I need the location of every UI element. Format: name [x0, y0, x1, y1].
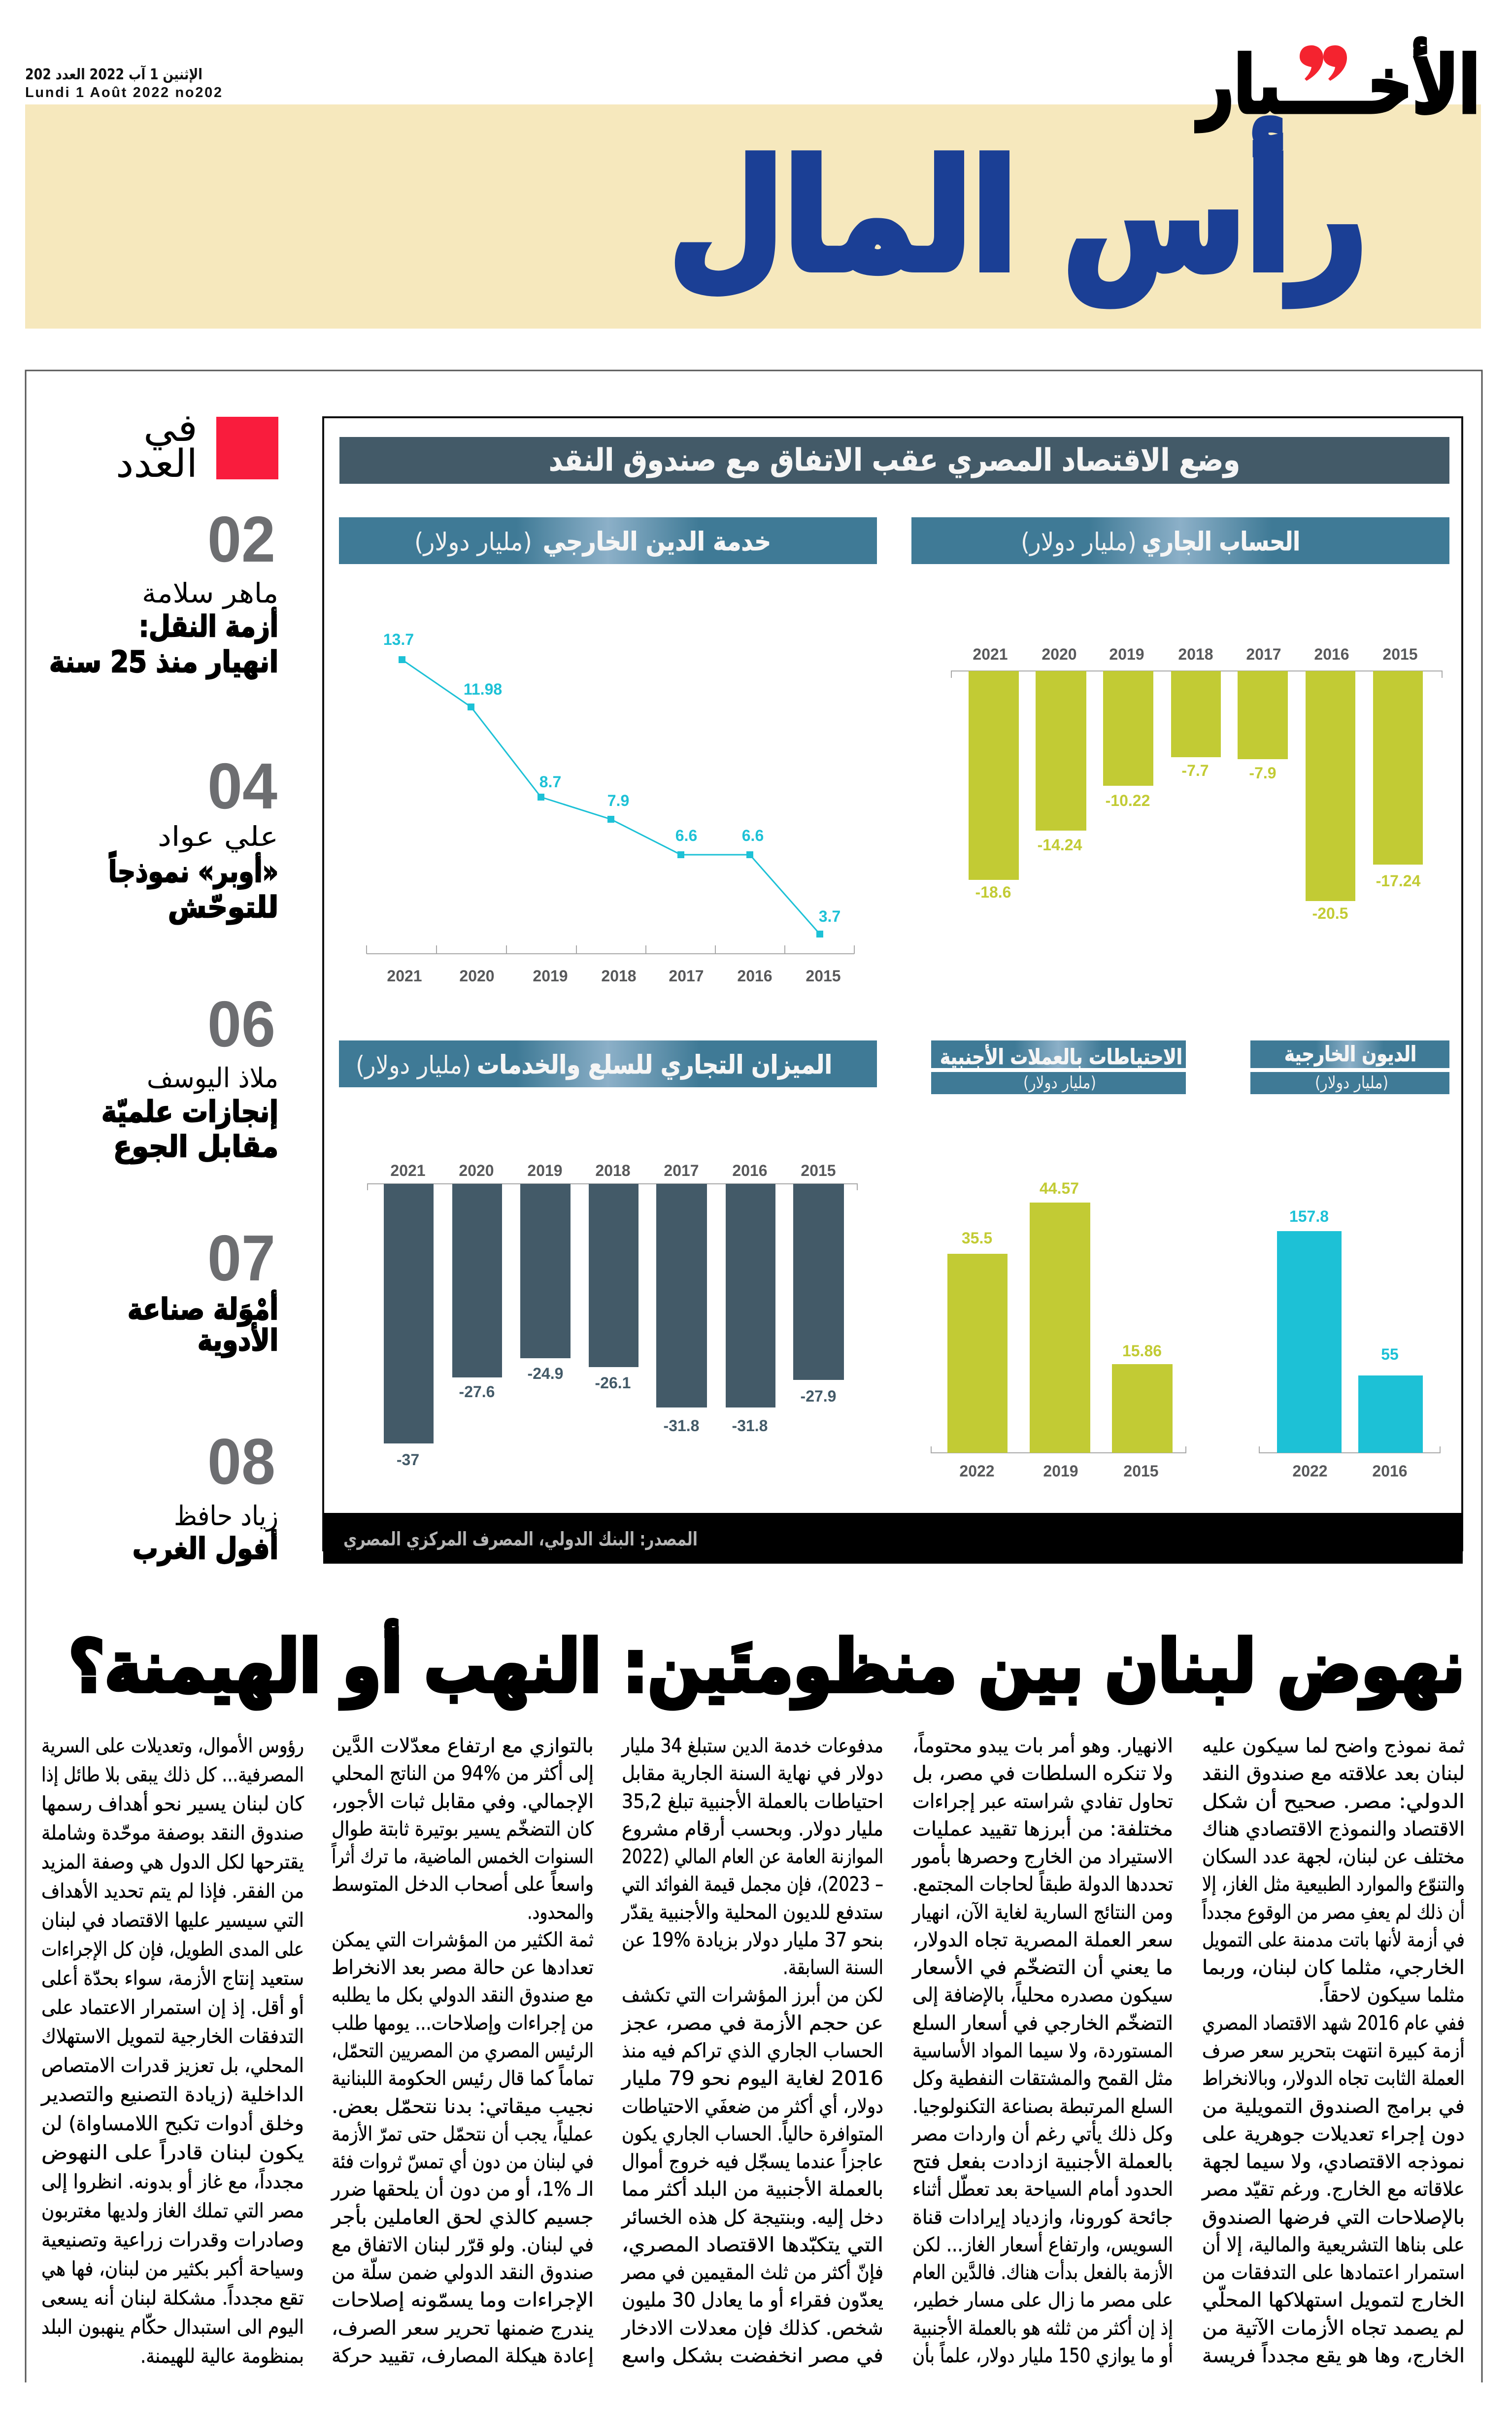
- line chart: 2018: [601, 967, 637, 985]
- article text: column 3: التي يتكبّدها الاقتصاد المصري،: [622, 2234, 883, 2256]
- article text: column 4: في لبنان. ولو قرّر لبنان الاتفاق مع: [332, 2234, 594, 2256]
- article text: column 3: يعدّون فقراء أو ما يعادل 30 مليون: [622, 2287, 883, 2312]
- heading: in this issue: العدد: [116, 442, 198, 486]
- banner: debt service: [339, 517, 877, 564]
- article text: column 1: الاقتصاد والنموذج الاقتصادي هناك: [1202, 1818, 1465, 1841]
- source bar: [323, 1513, 1463, 1564]
- article text: column 5: المصرفية... كل ذلك يبقى بلا طائل إذا: [41, 1764, 304, 1786]
- article text: column 4: مع صندوق النقد الدولي بكل ما يطلبه: [332, 1984, 594, 2007]
- panel: in this issue sidebar: [49, 406, 278, 1566]
- article text: column 5: مصر التي تملك الغاز ولديها مغتربون: [41, 2200, 304, 2222]
- article text: column 1: والتنوّع والموارد الطبيعية مثل الغاز، إلا: [1202, 1873, 1465, 1896]
- article text: column 5: وصادرات وقدرات زراعية وتصنيعية: [41, 2229, 304, 2251]
- article text: column 1: في برامج الصندوق التمويلية من: [1202, 2095, 1465, 2118]
- line chart: 2017: [669, 967, 704, 985]
- bar chart: 2019: [1043, 1462, 1078, 1480]
- article text: column 3: الحساب الجاري الذي تراكم فيه منذ: [622, 2040, 883, 2062]
- line chart: 2021: [387, 967, 422, 985]
- item: page 02: 02: [207, 503, 275, 575]
- article text: column 1: استمرار اعتمادها على التدفقات من: [1202, 2261, 1465, 2284]
- bar chart: 35.5: [962, 1229, 992, 1247]
- bar chart: 2019: [527, 1162, 563, 1179]
- article text: column 1: مختلف عن لبنان، لجهة عدد السكان: [1202, 1845, 1465, 1868]
- article text: column 4: بالتوازي مع ارتفاع معدّلات الدَّين: [332, 1734, 594, 1757]
- icon: red quote mark: [1300, 45, 1347, 81]
- item: page 07: أمْوَلة صناعة: [128, 1290, 278, 1327]
- bar chart: 2022: [959, 1462, 995, 1480]
- item: page 08: [133, 1425, 278, 1566]
- article text: column 2: المستوردة، ولا سيما المواد الأساسية: [912, 2038, 1173, 2062]
- bar chart: 2015: [1123, 1462, 1159, 1480]
- banner: foreign reserves: [931, 1040, 1186, 1094]
- heading: in this issue: [116, 406, 278, 486]
- item: page 04: للتوحّش: [168, 890, 278, 925]
- article text: column 5: رؤوس الأموال، وتعديلات على السرية: [41, 1733, 304, 1757]
- article text: column 3: ستدفع للديون المحلية والأجنبية يقدّر: [621, 1900, 883, 1924]
- article text: column 3: عن حجم الأزمة في مصر، عجز: [621, 2010, 883, 2035]
- article text: column 2: على مصر ما زال على مسار خطير،: [912, 2289, 1173, 2312]
- line chart: 8.7: [539, 773, 561, 791]
- bar chart: 15.86: [1122, 1342, 1162, 1360]
- article text: column 5: المحلي، بل تعزيز قدرات الامتصاص: [41, 2054, 304, 2077]
- article text: column 4: الإجمالي. وفي مقابل ثبات الأجور،: [332, 1789, 594, 1813]
- line chart: 3.7: [819, 907, 840, 925]
- article text: column 3: شخص. كذلك فإن معدلات الادخار: [621, 2317, 883, 2340]
- article text: column 1: أزمة كبيرة انتهت بتحرير سعر صرف: [1202, 2038, 1465, 2062]
- item: page 06: ملاذ اليوسف: [147, 1062, 278, 1094]
- article text: column 3: 2016 لغاية اليوم نحو 79 مليار: [621, 2067, 883, 2090]
- bar chart: 2018: [595, 1162, 631, 1179]
- article text: column 5: [40, 1733, 304, 2368]
- article text: column 2: إذ إن أكثر من ثلثه هو بالعملة الأجنبية: [912, 2315, 1173, 2340]
- article text: column 2: تحددها الدولة طبقاً لحاجات المجتمع.: [912, 1870, 1173, 1896]
- line chart: 6.6: [742, 827, 764, 844]
- article text: column 4: السنوات الخمس الماضية، ما ترك أثراً: [332, 1842, 594, 1868]
- article text: column 4: ثمة الكثير من المؤشرات التي يمكن: [332, 1929, 594, 1951]
- item: page 02: ماهر سلامة: [142, 577, 278, 609]
- item: page 08: زياد حافظ: [174, 1500, 278, 1532]
- masthead band: [25, 104, 1481, 329]
- article text: column 2: الأزمة بالفعل بدأت هناك. فالدَّين العام: [912, 2259, 1173, 2284]
- article text: column 1: أن ذلك لم يعفِ مصر من الوقوع مجدداً: [1202, 1898, 1465, 1924]
- article text: column 3: في مصر انخفضت بشكل واسع: [622, 2345, 883, 2367]
- article text: column 1: على بناها التشريعية والمالية، إلا أن: [1202, 2232, 1465, 2256]
- article text: column 4: والمحدود.: [527, 1901, 594, 1924]
- bar chart: 2021: [973, 645, 1008, 663]
- banner: current account: [911, 517, 1449, 564]
- item: page 04: [108, 750, 278, 925]
- bar chart: 2019: [1109, 645, 1144, 663]
- article text: column 4: إلى أكثر من %94 من الناتج المحلي: [332, 1760, 594, 1785]
- article text: column 2: سيكون مصدره محلياً، بالإضافة إلى: [912, 1980, 1173, 2007]
- date and issue: Lundi 1 Août 2022 no202: [25, 85, 222, 100]
- article text: column 5: من الفقر. فإذا لم يتم تحديد الأهداف: [41, 1878, 304, 1903]
- article text: column 4: يندرج ضمنها تحرير سعر الصرف،: [332, 2317, 594, 2340]
- banner: foreign reserves: الاحتياطات بالعملات الأجنبية: [940, 1044, 1182, 1070]
- article text: column 4: الـ %1، أو من دون أن يلحقها ضرر: [331, 2176, 594, 2201]
- line chart: [367, 631, 854, 985]
- bar chart: 2015: [801, 1162, 836, 1179]
- item: page 04: 04: [207, 750, 277, 822]
- bar chart: 2016: [1372, 1462, 1408, 1480]
- bar chart: 2016: [732, 1162, 768, 1179]
- line chart: 7.9: [607, 792, 629, 809]
- line chart: 2020: [459, 967, 495, 985]
- article text: column 3: المتوافرة حالياً. الحساب الجاري يكون: [622, 2119, 883, 2145]
- article text: column 2: التضخّم الخارجي في أسعار السلع: [912, 2010, 1173, 2035]
- article text: column 5: كان لبنان يسير نحو أهداف رسمها: [41, 1791, 304, 1815]
- article text: column 3: دولار في نهاية السنة الجارية مقابل: [622, 1762, 883, 1785]
- line chart: 11.98: [464, 680, 502, 698]
- bar chart: -7.9: [1249, 764, 1277, 782]
- article text: column 5: التدفقات الخارجية لتمويل الاستهلاك: [41, 2025, 304, 2048]
- article text: column 4: صندوق النقد الدولي ضمن سلّة من: [332, 2257, 594, 2284]
- line chart: 13.7: [383, 631, 414, 648]
- article text: column 4: واسعاً على أصحاب الدخل المتوسط: [332, 1870, 594, 1896]
- article text: column 4: جسيم كالذي لحق العاملين بأجر: [331, 2204, 594, 2229]
- item: page 06: 06: [207, 988, 275, 1060]
- article text: column 1: العملة الثابت تجاه الدولار، وبالانخراط: [1202, 2067, 1465, 2090]
- item: page 02: أزمة النقل:: [139, 607, 278, 644]
- article text: column 1: لم يصمد تجاه الأزمات الآتية من: [1202, 2315, 1465, 2340]
- banner: trade balance: الميزان التجاري للسلع والخدمات: [477, 1050, 832, 1080]
- article text: column 2: تحاول تفادي شراسته عبر إجراءات: [912, 1790, 1173, 1813]
- article text: column 2: مختلفة: من أبرزها تقييد عمليات: [912, 1816, 1173, 1841]
- item: page 04: «أوبر» نموذجاً: [108, 851, 278, 889]
- article text: column 3: مدفوعات خدمة الدين ستبلغ 34 مليار: [621, 1735, 883, 1757]
- bar chart: [368, 1162, 857, 1469]
- article text: column 5: بمنظومة عالية للهيمنة.: [140, 2345, 304, 2368]
- article text: column 1: الخارج لتمويل استهلاكها المحلّي: [1202, 2285, 1465, 2312]
- article text: column 1: علاقاته مع الخارج. ورغم تقيّد مصر: [1201, 2178, 1465, 2201]
- banner: trade balance: [339, 1040, 877, 1087]
- article text: column 5: تقع مجدداً. مشكلة لبنان أنه يسعى: [41, 2283, 304, 2310]
- date and issue: الإثنين 1 آب 2022 العدد 202: [25, 65, 202, 83]
- article text: column 4: تماماً كما قال رئيس الحكومة اللبنانية: [332, 2064, 594, 2090]
- panel: external debt service line chart: [339, 517, 877, 985]
- bar chart: -10.22: [1106, 792, 1150, 809]
- bar chart: -31.8: [664, 1417, 699, 1435]
- article text: column 3: السنة السابقة.: [783, 1956, 883, 1979]
- line chart: 2019: [533, 967, 568, 985]
- item: page 07: 07: [207, 1222, 275, 1294]
- bar chart: -24.9: [528, 1365, 563, 1382]
- item: page 02: [49, 503, 278, 679]
- article text: column 1: لبنان بعد علاقته مع صندوق النقد: [1202, 1762, 1465, 1785]
- article text: column 1: ثمة نموذج واضح لما سيكون عليه: [1202, 1735, 1465, 1758]
- article text: column 5: الداخلية (زيادة التصنيع والتصدير: [40, 2083, 304, 2106]
- panel: external debt bar chart: [1250, 1040, 1449, 1480]
- bar chart: 2017: [664, 1162, 699, 1179]
- item: page 06: إنجازات علميّة: [101, 1095, 278, 1129]
- date and issue: [25, 65, 222, 100]
- article text: column 3: لكن من أبرز المؤشرات التي تكشف: [622, 1982, 883, 2007]
- article text: column 3: بالعملة الأجنبية من البلد أكثر مما: [622, 2176, 883, 2201]
- article text: column 4: نجيب ميقاتي: بدنا نتحمّل بعض.: [332, 2095, 594, 2118]
- item: page 07: الأدوية: [198, 1322, 278, 1358]
- article text: column 4: الرئيس المصري من المصريين التحمّل،: [332, 2040, 594, 2062]
- banner: debt service: (مليار دولار): [414, 528, 532, 557]
- article text: column 1: دون إجراء تعديلات جوهرية على: [1202, 2123, 1465, 2145]
- article text: column 5: وخلق أدوات تكبح اللامساواة) لن: [41, 2110, 304, 2135]
- article text: column 3: فإنّ أكثر من ثلث المقيمين في مصر: [621, 2259, 883, 2284]
- bar chart: 2020: [1042, 645, 1077, 663]
- source bar: المصدر: البنك الدولي، المصرف المركزي المصري: [343, 1528, 698, 1550]
- bar chart: [951, 645, 1442, 922]
- article text: column 3: – 2023)، فإن مجمل قيمة الفوائد التي: [622, 1873, 883, 1896]
- article text: column 3: دخل إليه. وبنتيجة كل هذه الخسائر: [621, 2206, 883, 2229]
- bar chart: [1259, 1207, 1440, 1480]
- article text: column 2: سعر العملة المصرية تجاه الدولار،: [912, 1929, 1173, 1951]
- item: page 08: أفول الغرب: [133, 1529, 278, 1566]
- article text: column 4: تعدادها عن حالة مصر بعد الانخراط: [332, 1956, 594, 1979]
- bar chart: -37: [397, 1451, 419, 1469]
- article text: column 5: اليوم الى استبدال حكّام ينهبون البلد: [41, 2313, 304, 2339]
- banner: external debt: [1250, 1040, 1449, 1094]
- article text: column 1: ففي عام 2016 شهد الاقتصاد المصري: [1202, 2012, 1465, 2035]
- panel: trade balance bar chart: [339, 1040, 877, 1469]
- bar chart: 2015: [1382, 645, 1418, 663]
- bar chart: -27.9: [801, 1387, 836, 1405]
- article text: column 2: السويس، وارتفاع أسعار الغاز... لكن: [912, 2232, 1173, 2256]
- article text: column 2: الحدود أمام السياحة بعد تعطّل أثناء: [912, 2174, 1173, 2201]
- article text: column 1: مثلما سيكون لاحقاً.: [1318, 1980, 1465, 2007]
- bar chart: -14.24: [1038, 836, 1082, 854]
- banner: foreign reserves: (مليار دولار): [1023, 1073, 1096, 1093]
- article text: column 3: مليار دولار. وبحسب أرقام مشروع: [622, 1816, 883, 1841]
- article text: column 5: التي سيسير عليها الاقتصاد في لبنان: [41, 1909, 304, 1932]
- bar chart: 2018: [1178, 645, 1213, 663]
- bar chart: 55: [1381, 1345, 1399, 1363]
- article text: column 2: بالعملة الأجنبية ازدادت بفعل فتح: [912, 2149, 1173, 2173]
- heading: in this issue: في: [143, 406, 198, 450]
- article text: column 1: في أزمة لأنها باتت مدمنة على التمويل: [1202, 1927, 1465, 1951]
- banner: trade balance: (مليار دولار): [356, 1051, 471, 1080]
- bar chart: 2020: [459, 1162, 494, 1179]
- bar chart: -20.5: [1312, 904, 1348, 922]
- banner: current account: الحساب الجاري: [1142, 527, 1300, 557]
- article text: column 2: ومن النتائج السارية لغاية الآن، انهيار: [911, 1901, 1173, 1924]
- article text: column 4: كان التضخّم يسير بوتيرة ثابتة طوال: [332, 1818, 594, 1841]
- article text: column 5: وسياحة أكبر بكثير من لبنان، فها هي: [41, 2256, 304, 2280]
- article text: column 5: يقترحها لكل الدول هي وصفة المزيد: [41, 1851, 304, 1874]
- article text: column 2: السلع المرتبطة بصناعة التكنولوجيا.: [912, 2095, 1173, 2118]
- bar chart: -27.6: [459, 1383, 495, 1401]
- article text: column 5: صندوق النقد بوصفة موحّدة وشاملة: [41, 1822, 304, 1844]
- section title: رأس المال: [669, 118, 1367, 306]
- article text: column 5: أو أقل. إذ إن استمرار الاعتماد على: [41, 1994, 304, 2019]
- bar chart: 2021: [390, 1162, 426, 1179]
- article text: column 2: [911, 1731, 1173, 2367]
- line chart: 2015: [806, 967, 841, 985]
- article text: column 3: دولار، أي أكثر من ضعفَي الاحتياطات: [622, 2093, 883, 2118]
- article text: column 3: [621, 1735, 883, 2367]
- bar chart: 2017: [1246, 645, 1281, 663]
- banner: debt service: خدمة الدين الخارجي: [543, 527, 771, 557]
- article text: column 4: إعادة هيكلة المصارف، تقييد حركة: [332, 2345, 594, 2367]
- article text: column 4: من إجراءات وإصلاحات... يومها طلب: [332, 2012, 594, 2035]
- bar chart: -18.6: [975, 883, 1011, 901]
- bar chart: -17.24: [1376, 872, 1421, 890]
- article text: column 4: [331, 1734, 594, 2367]
- article text: column 2: وكل ذلك يأتي رغم أن واردات مصر: [911, 2120, 1173, 2145]
- article text: column 2: ولا تنكره السلطات في مصر، بل: [912, 1762, 1173, 1785]
- line chart: 6.6: [675, 827, 697, 844]
- line chart: 2016: [737, 967, 773, 985]
- bar chart: 2022: [1292, 1462, 1328, 1480]
- article text: column 1: بالإصلاحات التي فرضها الصندوق: [1202, 2206, 1465, 2229]
- article text: column 1: [1201, 1735, 1465, 2368]
- banner: external debt: (مليار دولار): [1315, 1073, 1388, 1093]
- article text: column 5: مجدداً، مع غاز أو بدونه. انظروا إلى: [41, 2167, 304, 2193]
- article text: column 2: جائحة كورونا، وازدياد إيرادات قناة: [912, 2206, 1173, 2229]
- item: page 07: [128, 1222, 278, 1358]
- article text: column 5: على المدى الطويل، فإن كل الإجراءات: [41, 1938, 304, 1961]
- chart heading banner: [339, 437, 1449, 484]
- article text: column 3: بنحو 37 مليار دولار بزيادة %19 عن: [622, 1929, 883, 1951]
- item: page 04: علي عواد: [158, 821, 278, 853]
- article text: column 2: ما يعني أن التضخّم في الأسعار: [911, 1954, 1173, 1979]
- article text: column 4: الإجراءات وما يسمّونه إصلاحات: [332, 2289, 594, 2312]
- article text: column 1: نموذجه الاقتصادي، ولا سيما لجهة: [1202, 2150, 1465, 2173]
- article text: column 3: الموازنة العامة عن العام المالي (2022: [622, 1845, 883, 1868]
- bar chart: 2016: [1314, 645, 1349, 663]
- panel: Egyptian economy charts: [323, 417, 1463, 1564]
- banner: external debt: الديون الخارجية: [1284, 1042, 1416, 1067]
- bar chart: 157.8: [1289, 1207, 1329, 1225]
- article text: column 2: مثل القمح والمشتقات النفطية وكل: [912, 2067, 1173, 2090]
- item: page 02: انهيار منذ 25 سنة: [49, 645, 278, 679]
- bar chart: 44.57: [1040, 1179, 1079, 1197]
- chart heading banner: وضع الاقتصاد المصري عقب الاتفاق مع صندوق النقد: [549, 442, 1240, 478]
- item: page 06: مقابل الجوع: [113, 1130, 278, 1164]
- bar chart: -31.8: [732, 1417, 768, 1435]
- article text: column 5: ستعيد إنتاج الأزمة، سواء بحدّة أعلى: [41, 1965, 304, 1990]
- bar chart: [931, 1179, 1186, 1480]
- panel: foreign reserves bar chart: [931, 1040, 1186, 1480]
- item: page 08: 08: [207, 1425, 275, 1498]
- item: page 06: [101, 988, 278, 1164]
- article text: column 2: الاستيراد من الخارج وحصرها بأمور: [911, 1843, 1173, 1869]
- article text: column 1: الخارجي، مثلما كان لبنان، وربما: [1202, 1956, 1465, 1979]
- article text: column 2: أو ما يوازي 150 مليار دولار، علماً بأن: [912, 2341, 1173, 2367]
- article text: column 5: يكون لبنان قادراً على النهوض: [41, 2138, 304, 2164]
- article text: column 3: عاجزاً عندما يسجّل فيه خروج أموال: [622, 2147, 883, 2174]
- article text: column 4: عملياً، يجب أن نتحمّل حتى تمرّ الأزمة: [332, 2119, 594, 2145]
- article text: column 1: الخارج، وها هو يقع مجدداً فريسة: [1202, 2341, 1465, 2368]
- panel: current account bar chart: [911, 517, 1449, 922]
- article text: column 3: احتياطات بالعملة الأجنبية تبلغ 35,2: [622, 1789, 883, 1813]
- bar chart: -7.7: [1181, 762, 1209, 779]
- article text: column 2: الانهيار. وهو أمر بات يبدو محتوماً،: [912, 1731, 1173, 1757]
- article text: column 1: الدولي: مصر. صحيح أن شكل: [1202, 1788, 1465, 1813]
- bar chart: -26.1: [595, 1374, 631, 1392]
- article text: column 4: في لبنان من دون أي تمسّ ثروات فئة: [332, 2148, 594, 2173]
- banner: current account: (مليار دولار): [1021, 528, 1137, 557]
